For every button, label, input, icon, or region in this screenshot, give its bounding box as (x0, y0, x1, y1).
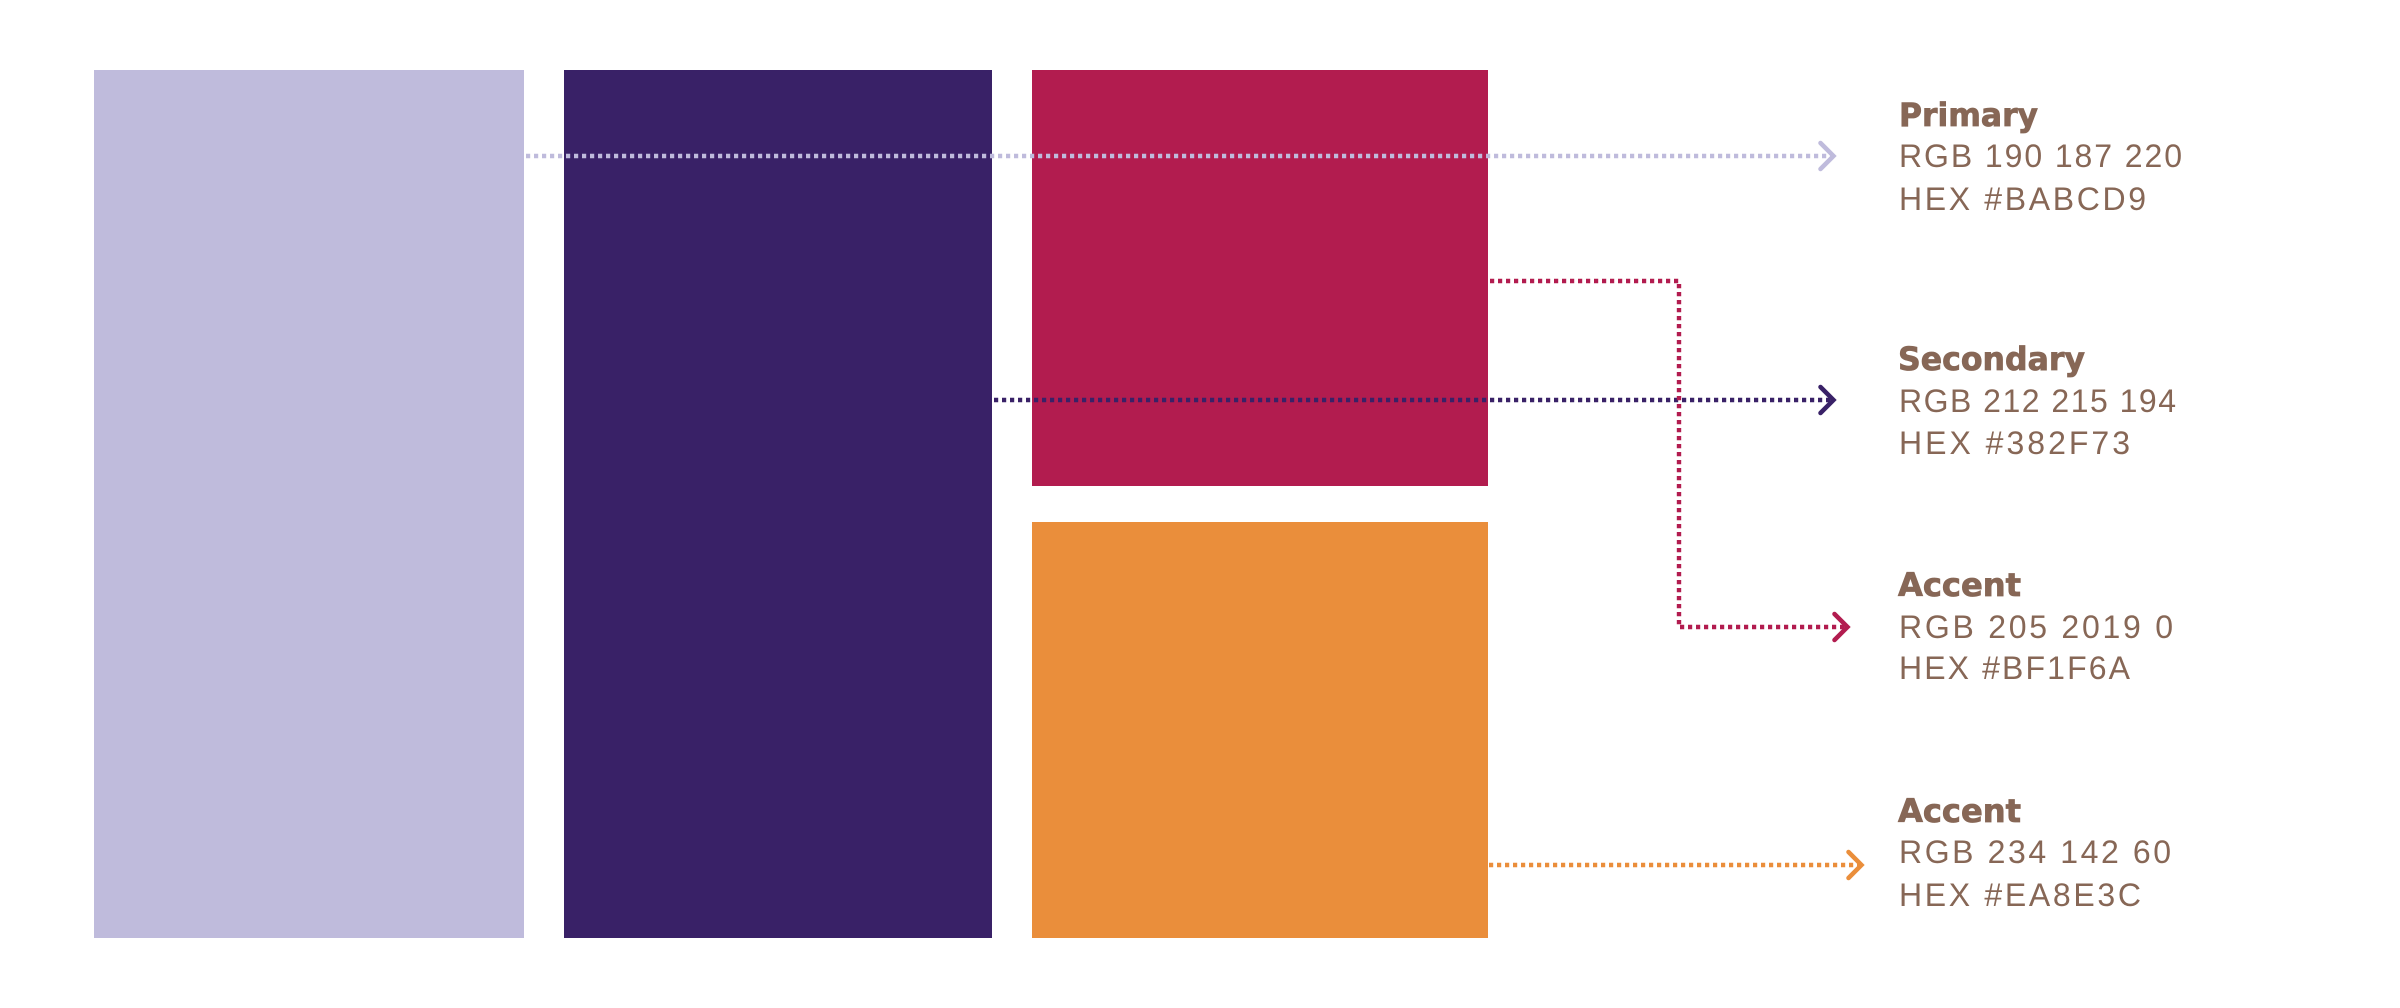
label: secondary colour values: RGB 212 215 194 (1899, 383, 2176, 419)
label: primary colour values: Primary (1899, 96, 2038, 134)
label: secondary colour values: Secondary (1898, 340, 2085, 378)
label: primary colour values: RGB 190 187 220 (1899, 138, 2182, 174)
arrow: accent orange connector (1489, 852, 1862, 878)
arrow: accent crimson connector (1490, 281, 1848, 640)
label: accent crimson colour values: HEX #BF1F6A (1899, 650, 2131, 686)
swatch: secondary dark purple (564, 70, 992, 938)
swatch: accent orange (1032, 522, 1488, 938)
swatch: primary lavender (94, 70, 524, 938)
label: accent orange colour values: RGB 234 142 60 (1899, 834, 2171, 870)
label: accent orange colour values (1898, 792, 2171, 913)
label: primary colour values (1899, 96, 2182, 217)
arrow: secondary connector (994, 387, 1834, 413)
label: accent crimson colour values (1898, 566, 2173, 686)
label: accent crimson colour values: RGB 205 2019 0 (1899, 609, 2173, 645)
swatch: accent crimson (1032, 70, 1488, 486)
label: primary colour values: HEX #BABCD9 (1899, 181, 2146, 217)
label: accent orange colour values: Accent (1898, 792, 2021, 830)
label: accent crimson colour values: Accent (1898, 566, 2021, 604)
label: accent orange colour values: HEX #EA8E3C (1899, 877, 2141, 913)
arrow: primary connector (526, 143, 1834, 169)
label: secondary colour values: HEX #382F73 (1899, 425, 2130, 461)
label: secondary colour values (1898, 340, 2176, 461)
